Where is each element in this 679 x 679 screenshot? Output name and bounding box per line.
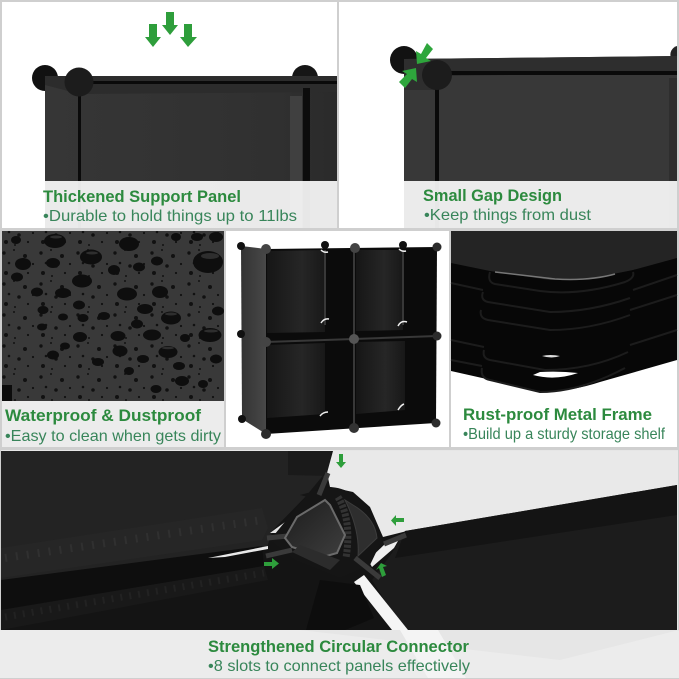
- upper-right cube: [356, 250, 403, 331]
- panel: small gap design: [339, 2, 677, 228]
- lower-left cube: [267, 343, 325, 418]
- connector glints: [320, 249, 407, 416]
- white slit: [354, 575, 408, 630]
- dividers: [266, 250, 437, 428]
- panel: strengthened circular connector: [0, 450, 679, 678]
- panel: waterproof and dustproof: [2, 231, 224, 447]
- icon: two converging arrows: [399, 43, 433, 88]
- heading: waterproof and dustproof: Waterproof & Dustproof: [5, 406, 201, 425]
- heading: thickened support panel: Thickened Support Panel: [43, 187, 241, 206]
- panel: product photo cube shelf: [226, 231, 449, 447]
- heading: strengthened circular connector: Strengthened Circular Connector: [208, 637, 469, 656]
- icon: three down arrows: [145, 12, 197, 47]
- panel photo: gap corner: [390, 46, 677, 228]
- corner connectors: [237, 241, 442, 439]
- heading: rust-proof metal frame: Rust-proof Metal Frame: [463, 405, 652, 424]
- lower-right cube: [356, 341, 405, 414]
- text: durable: •Durable to hold things up to 11lbs: [43, 208, 297, 225]
- text: keep from dust: •Keep things from dust: [424, 207, 592, 224]
- panel: thickened support panel: [2, 2, 337, 228]
- front openings: [266, 247, 437, 434]
- panel: rust-proof metal frame: [451, 231, 677, 447]
- side panels: [241, 246, 266, 434]
- text: sturdy shelf: •Build up a sturdy storage shelf: [463, 426, 666, 443]
- heading: small gap design: Small Gap Design: [423, 186, 562, 205]
- panel photo: shelf corner: [32, 65, 337, 228]
- right black panel: [372, 485, 677, 630]
- upper-left cube: [267, 250, 325, 333]
- icon: connector arrows: [264, 454, 404, 577]
- photo: connector close-up: [1, 451, 678, 630]
- text: 8 slots: •8 slots to connect panels effectively: [208, 658, 470, 675]
- photo: stacked metal frames: [451, 231, 677, 392]
- text: easy to clean: •Easy to clean when gets dirty: [5, 428, 221, 445]
- light background wedge: [327, 451, 678, 537]
- connector hub: [266, 473, 406, 578]
- photo: water droplets: [2, 231, 224, 401]
